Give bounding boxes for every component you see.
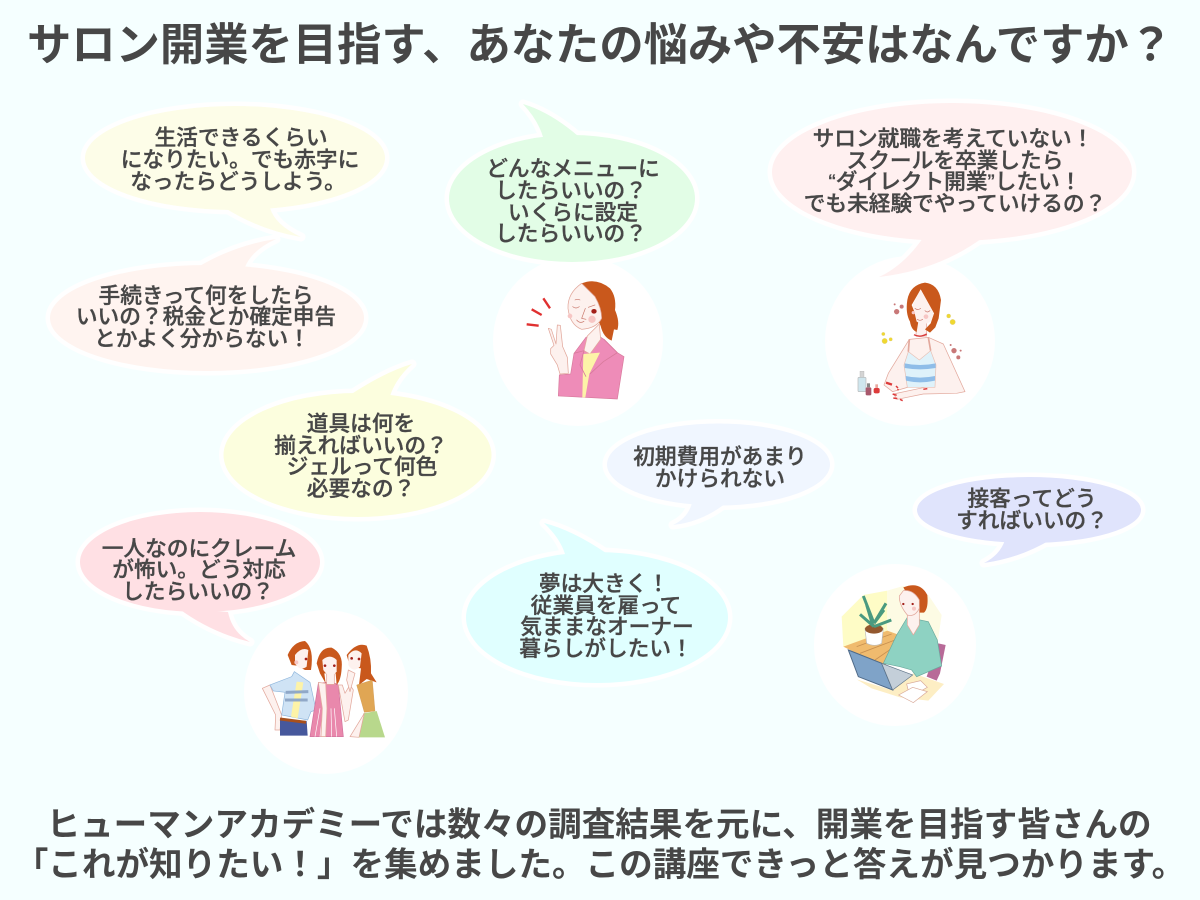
- speech bubble: direct opening worry: [772, 103, 1132, 277]
- speech bubble: owner dream: 気ままなオーナー: [520, 614, 694, 639]
- illustration circle: three friends: [244, 610, 408, 774]
- speech bubble: tools worry: 必要なの？: [307, 476, 415, 501]
- speech bubble: owner dream: 従業員を雇って: [531, 593, 681, 618]
- speech bubble: income worry: になりたい。でも赤字に: [121, 147, 359, 172]
- speech bubble: owner dream: [466, 523, 728, 683]
- speech bubble: initial cost worry: 初期費用があまり: [633, 444, 807, 469]
- speech bubble: tools worry: 道具は何を: [307, 411, 415, 436]
- speech bubble: complaint worry: したらいいの？: [122, 579, 274, 604]
- speech bubble: income worry: なったらどうしよう。: [130, 169, 346, 194]
- speech bubble: initial cost worry: かけられない: [655, 466, 785, 491]
- closing message: 「これが知りたい！」を集めました。この講座できっと答えが見つかります。: [15, 845, 1185, 884]
- speech bubble: menu and pricing worry: [449, 104, 695, 262]
- speech bubble: paperwork worry: 手続きって何をしたら: [99, 283, 313, 308]
- speech bubble: customer service worry: [917, 477, 1141, 563]
- speech bubble: direct opening worry: スクールを卒業したら: [847, 148, 1063, 173]
- closing message: [15, 805, 1185, 884]
- speech bubble: direct opening worry: サロン就職を考えていない！: [813, 126, 1093, 151]
- speech bubble: paperwork worry: いいの？税金とか確定申告: [76, 304, 336, 329]
- speech bubble: menu and pricing worry: したらいいの？: [495, 178, 647, 203]
- speech bubble: paperwork worry: [50, 239, 364, 371]
- speech bubble: tools worry: ジェルって何色: [287, 454, 437, 479]
- title: サロン開業を目指す、あなたの悩みや不安はなんですか？: [27, 21, 1173, 70]
- speech bubble: income worry: [85, 106, 385, 237]
- illustration circle: woman working on a laptop: [814, 564, 976, 726]
- illustration circle: woman making a peace sign: [493, 256, 663, 426]
- speech bubble: owner dream: 暮らしがしたい！: [519, 636, 693, 661]
- speech bubble: paperwork worry: とかよく分からない！: [94, 326, 310, 351]
- speech bubble: direct opening worry: でも未経験でやっていけるの？: [804, 191, 1106, 216]
- speech bubble: initial cost worry: [607, 424, 830, 525]
- speech bubble: menu and pricing worry: したらいいの？: [495, 221, 647, 246]
- speech bubble: menu and pricing worry: どんなメニューに: [486, 156, 660, 181]
- speech bubble: direct opening worry: “ダイレクト開業”したい！: [828, 169, 1082, 194]
- illustration circle: woman painting nails: [825, 256, 995, 426]
- speech bubble: complaint worry: [80, 512, 320, 642]
- speech bubble: customer service worry: 接客ってどう: [967, 486, 1097, 511]
- speech bubble: complaint worry: 一人なのにクレーム: [102, 536, 296, 561]
- speech bubble: owner dream: 夢は大きく！: [539, 571, 669, 596]
- speech bubble: menu and pricing worry: いくらに設定: [508, 200, 638, 225]
- speech bubble: complaint worry: が怖い。どう対応: [112, 557, 286, 582]
- closing message: ヒューマンアカデミーでは数々の調査結果を元に、開業を目指す皆さんの: [46, 805, 1152, 844]
- speech bubble: customer service worry: すればいいの？: [956, 508, 1108, 533]
- speech bubble: tools worry: 揃えればいいの？: [274, 433, 448, 458]
- speech bubble: tools worry: [224, 364, 492, 517]
- speech bubble: income worry: 生活できるくらい: [154, 125, 328, 150]
